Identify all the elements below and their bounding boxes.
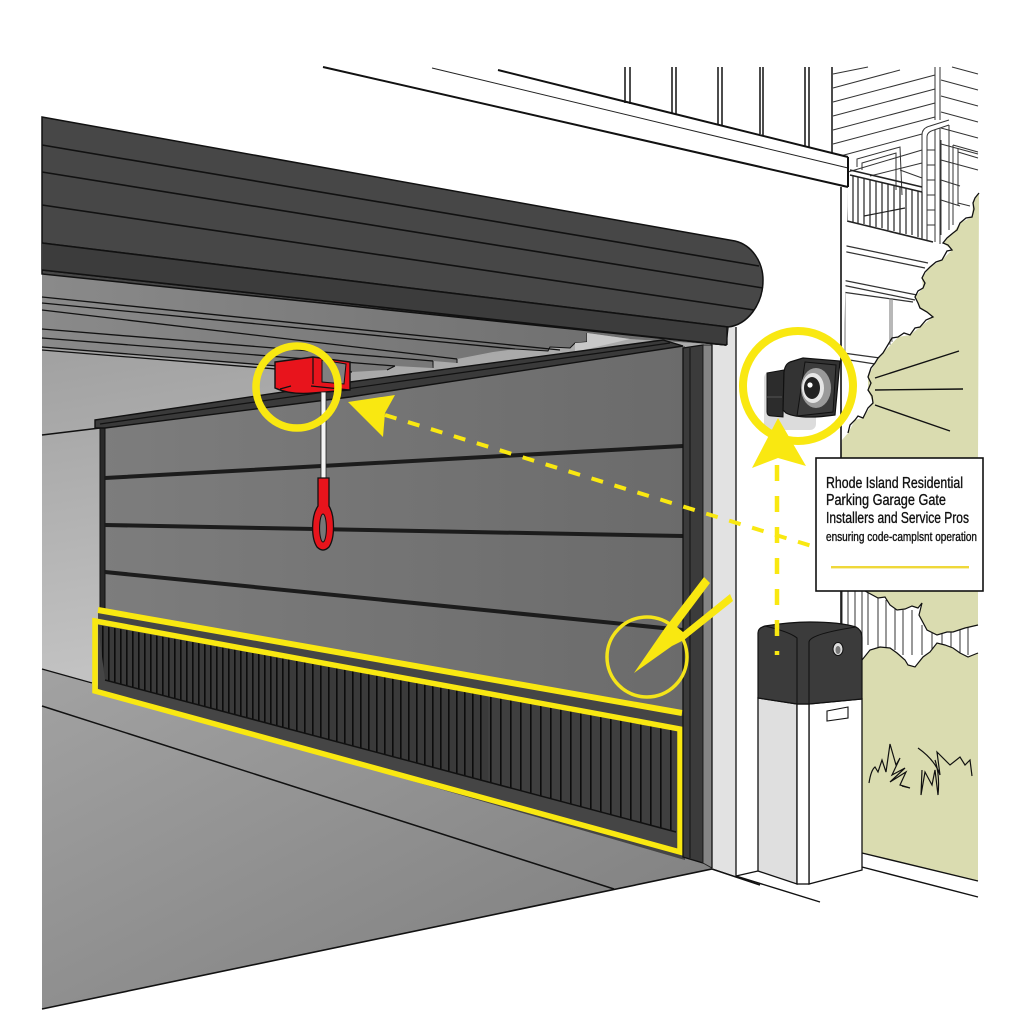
ground lines (736, 853, 978, 902)
garage interior wall (42, 300, 727, 700)
dashed pointer to red unit (348, 395, 815, 547)
garage floor (42, 669, 760, 1009)
shrub outline (862, 591, 978, 667)
shrub upper band (865, 591, 978, 635)
door jamb (683, 327, 736, 876)
lower fence behind shrub (842, 591, 968, 655)
dashed pointer to camera (752, 418, 806, 655)
camera highlight circle (743, 331, 853, 441)
door panel seams (105, 446, 683, 630)
highlight circle on red unit (256, 346, 338, 428)
shrub lower body (862, 643, 978, 881)
ceiling joists (42, 270, 726, 375)
balcony railing (843, 170, 933, 242)
title card (816, 458, 983, 591)
door bottom grille (98, 612, 685, 860)
red release cord and handle (313, 392, 334, 550)
background building siding and windows (833, 67, 978, 244)
red release unit (275, 357, 350, 393)
yellow underline (831, 566, 969, 568)
highlight: yellow grille frame (95, 610, 682, 852)
building front wall and eave (323, 67, 848, 876)
title text line 2: Parking Garage Gate (826, 492, 946, 509)
door top rail (95, 340, 683, 428)
highlight circle and wedge on door sensor (607, 577, 733, 697)
roller shutter housing (42, 117, 763, 345)
floor line on left wall (42, 428, 100, 435)
garage door panel (95, 340, 685, 860)
subtitle text: ensuring code-camplsnt operation (826, 530, 977, 544)
tree motion rays (875, 351, 963, 431)
title text line 1: Rhode Island Residential (826, 475, 963, 492)
title text line 3: Installers and Service Pros (826, 510, 969, 527)
lower storey with windows (842, 245, 928, 364)
grass tufts (869, 744, 972, 795)
gate operator pedestal (736, 622, 862, 884)
tree foliage (841, 193, 979, 460)
photo-eye camera callout (764, 358, 840, 430)
